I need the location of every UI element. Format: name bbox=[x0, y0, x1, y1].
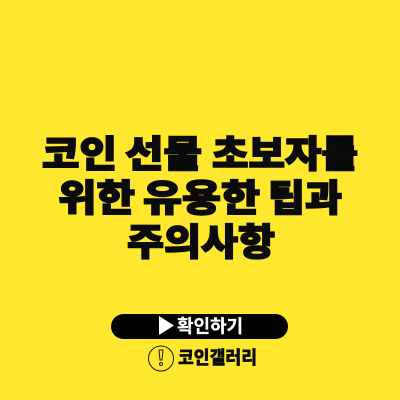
title line 1: 선물 bbox=[125, 134, 202, 175]
icon: exclamation circle bbox=[148, 346, 174, 371]
title line 2: 유용한 bbox=[143, 178, 260, 219]
title line 1: 코인 bbox=[42, 134, 117, 175]
title line 3: 주의사항 bbox=[127, 222, 275, 263]
button label: 확인하기 bbox=[177, 316, 243, 336]
brand name: 코인갤러리 bbox=[178, 348, 257, 368]
title line 2: 위한 bbox=[58, 178, 135, 219]
title line 1 bbox=[42, 134, 358, 175]
brand logo bbox=[148, 346, 257, 371]
title bbox=[42, 134, 358, 263]
title line 1: 초보자를 bbox=[212, 134, 358, 175]
icon: play triangle bbox=[159, 316, 174, 335]
title line 2 bbox=[58, 178, 342, 219]
title line 2: 팁과 bbox=[268, 178, 342, 219]
button pill bbox=[111, 314, 288, 339]
button: confirm bbox=[111, 314, 288, 339]
